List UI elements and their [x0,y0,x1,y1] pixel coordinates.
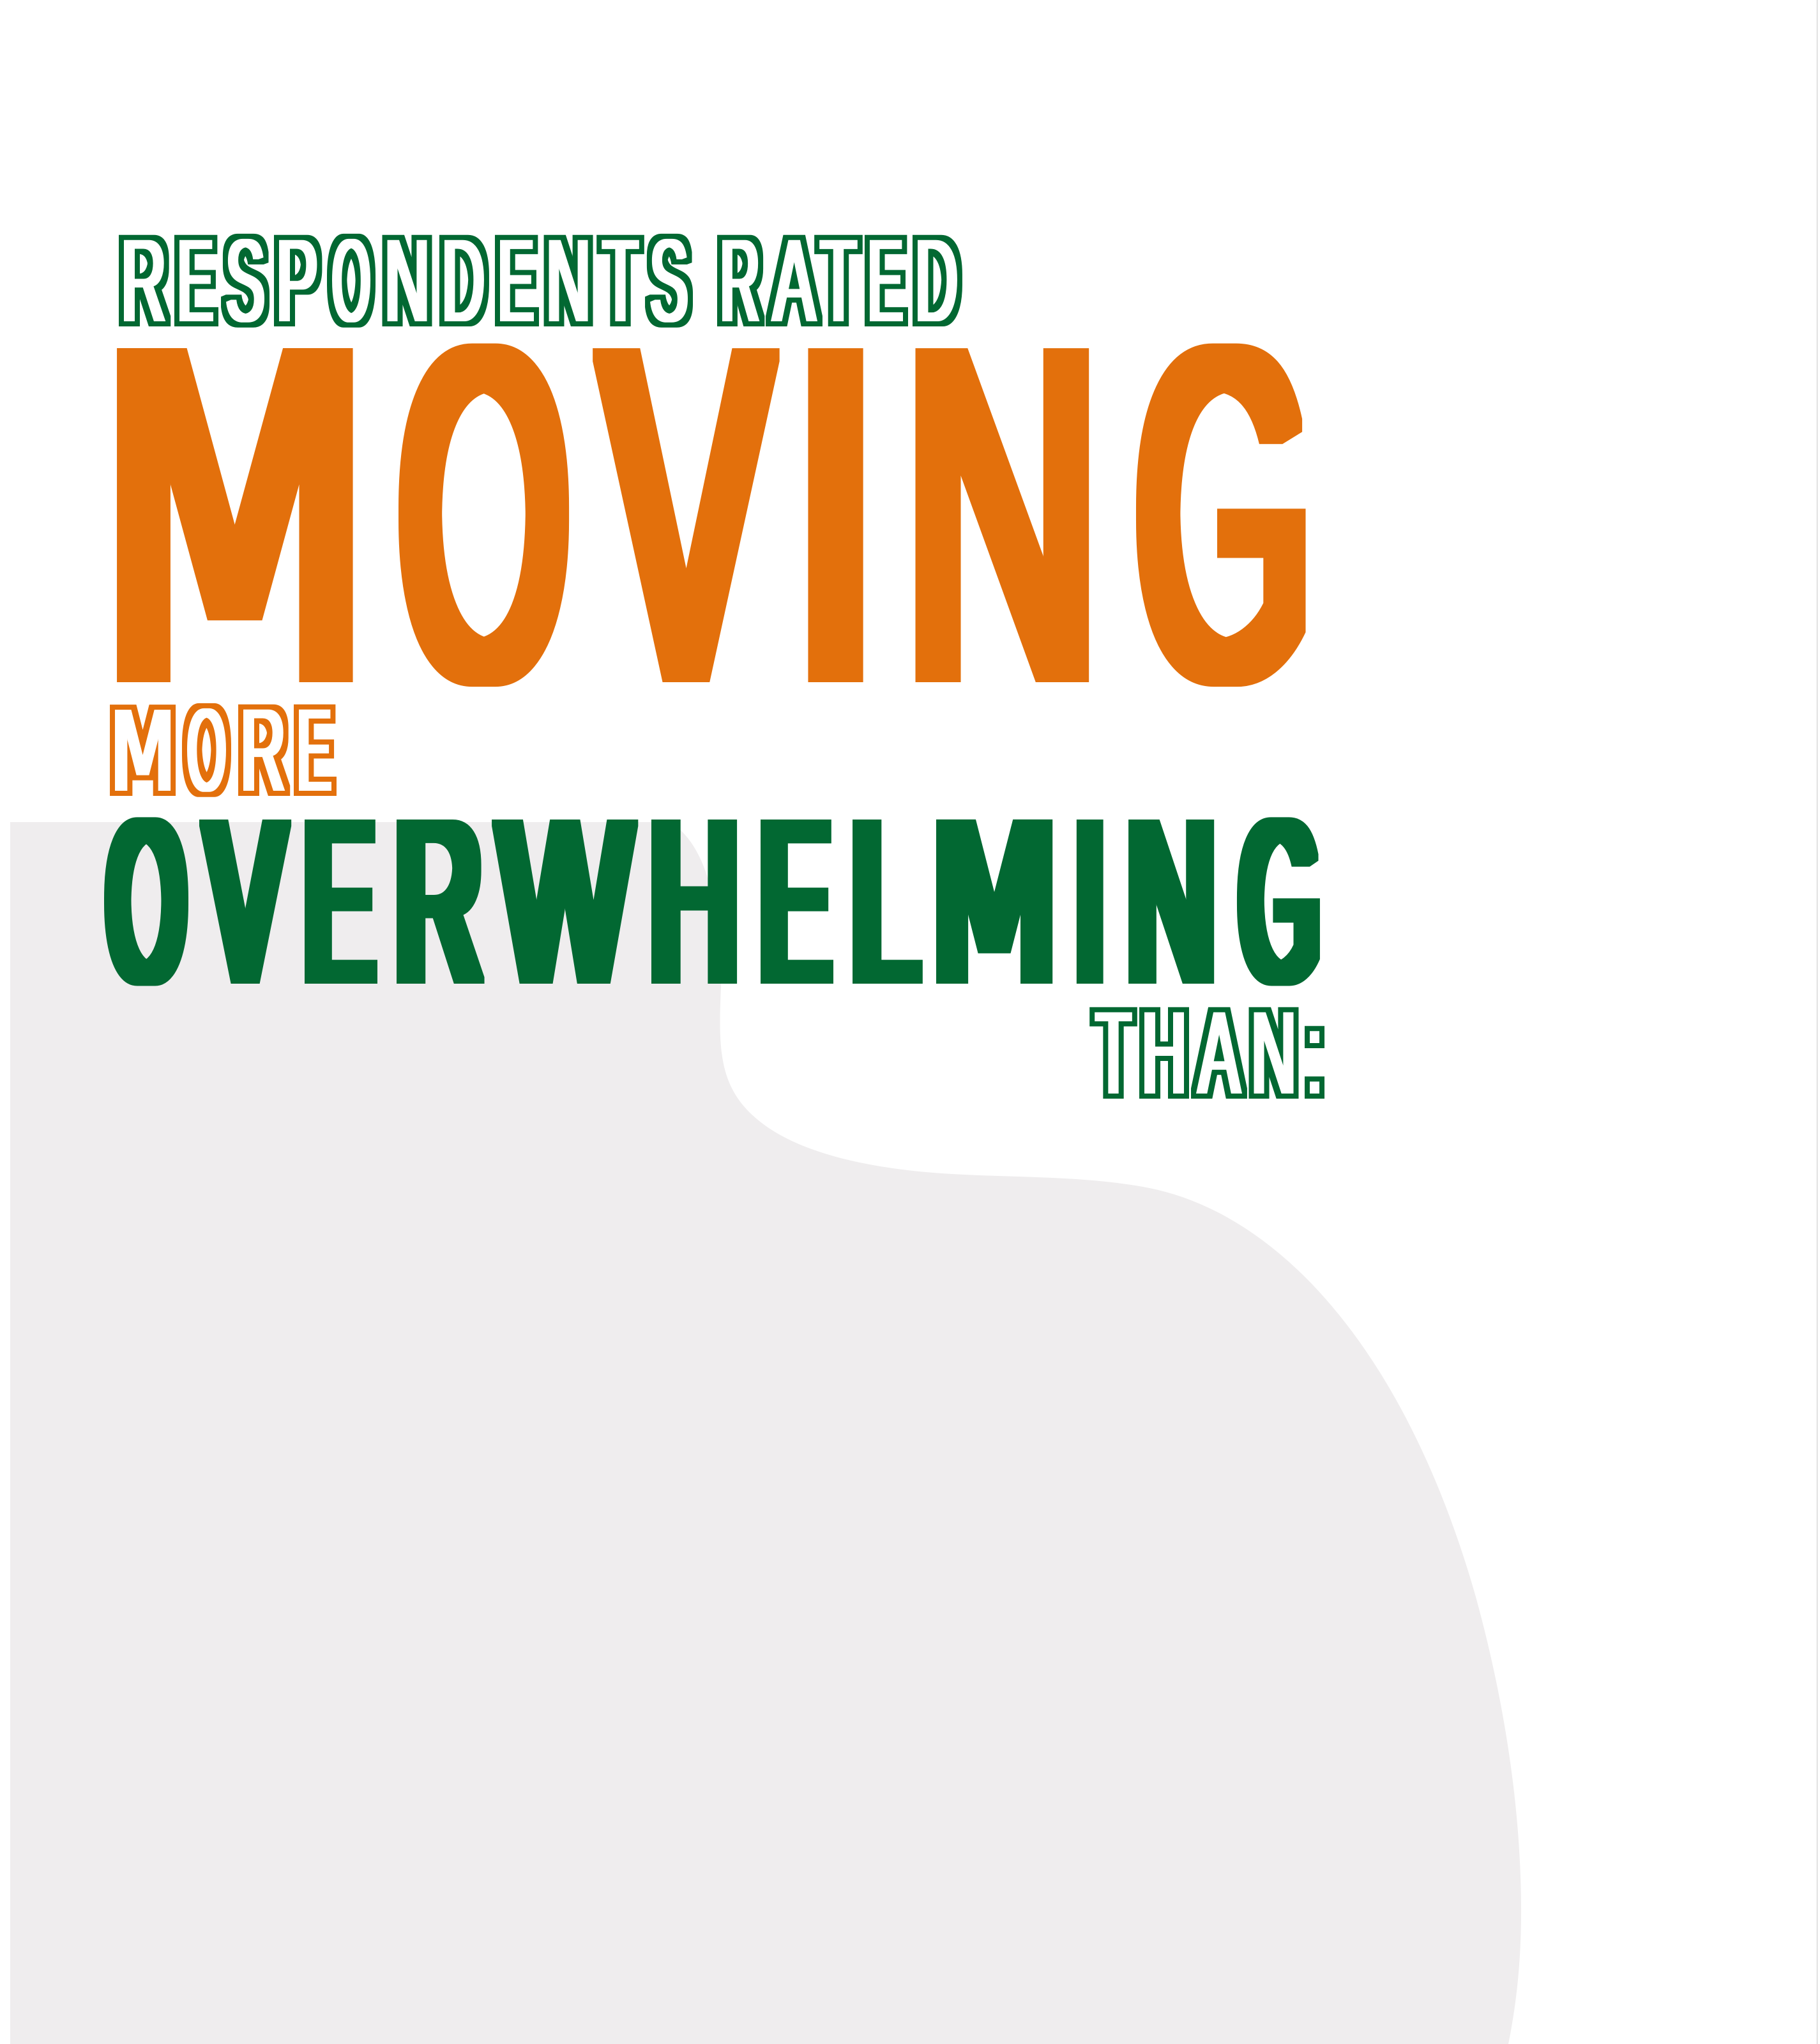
title: respondents rated moving more overwhelming than: E [298,685,331,816]
heading line: MORE (orange outline) [110,685,331,818]
heading line: RESPONDENTS RATED (green outline): S [226,215,264,347]
heading line: RESPONDENTS RATED (green outline): R [121,215,166,347]
heading line: OVERWHELMING (solid green): H [650,774,738,1030]
heading line: RESPONDENTS RATED (green outline): P [277,215,318,347]
heading line: MOVING (solid orange): I [788,253,883,775]
title: respondents rated moving more overwhelming than: D [916,215,957,347]
heading line: RESPONDENTS RATED (green outline) [121,215,957,347]
heading line: MORE (orange outline): M [110,688,176,818]
heading line: OVERWHELMING (solid green): O [109,774,184,1030]
heading line: THAN: (green outline): H [1142,988,1187,1119]
heading line: RESPONDENTS RATED (green outline): N [385,215,429,347]
heading line: RESPONDENTS RATED (green outline): E [498,215,534,347]
infographic canvas: : [1308,988,1321,1119]
heading line: OVERWHELMING (solid green): V [208,774,284,1030]
heading line: RESPONDENTS RATED (green outline): O [332,215,370,347]
heading line: OVERWHELMING (solid green): M [930,779,1058,1032]
title: respondents rated moving more overwhelming than [97,215,1321,1119]
heading line: THAN: (green outline) [1096,988,1321,1119]
heading line: THAN: (green outline): A [1199,988,1240,1119]
heading line: OVERWHELMING (solid green): L [852,774,918,1030]
heading line: OVERWHELMING (solid green): I [1077,774,1103,1030]
heading line: RESPONDENTS RATED (green outline): N [547,215,590,347]
heading line: OVERWHELMING (solid green): E [305,774,373,1030]
heading line: OVERWHELMING (solid green): N [1128,774,1215,1030]
heading line: MOVING (solid orange): N [905,253,1100,775]
infographic canvas: G [1241,774,1319,1030]
heading line: RESPONDENTS RATED (green outline): D [442,215,484,347]
heading line: OVERWHELMING (solid green): E [761,774,829,1030]
heading line: RESPONDENTS RATED (green outline): T [821,215,856,347]
background blob: grey curved panel [10,822,1521,2044]
heading line: MOVING (solid orange): V [603,253,770,775]
heading line: OVERWHELMING (solid green) [109,774,1319,1032]
heading line: THAN: (green outline): T [1096,988,1131,1119]
heading line: MOVING (solid orange) [97,253,1311,780]
heading line: MOVING (solid orange): M [97,267,372,780]
heading line: RESPONDENTS RATED (green outline): T [603,215,638,347]
heading line: RESPONDENTS RATED (green outline): S [650,215,688,347]
heading line: MOVING (solid orange): O [400,253,568,775]
heading line: RESPONDENTS RATED (green outline): A [773,215,815,347]
heading line: OVERWHELMING (solid green): W [500,774,631,1030]
heading line: RESPONDENTS RATED (green outline): E [868,215,903,347]
heading line: OVERWHELMING (solid green): R [396,774,481,1030]
heading line: MORE (orange outline): O [187,685,226,816]
heading line: MORE (orange outline): R [241,685,285,816]
heading line: RESPONDENTS RATED (green outline): E [178,215,213,347]
heading line: RESPONDENTS RATED (green outline): R [720,215,759,347]
title: respondents rated moving more overwhelming than: G [1136,253,1311,775]
heading line: THAN: (green outline): N [1252,988,1296,1119]
